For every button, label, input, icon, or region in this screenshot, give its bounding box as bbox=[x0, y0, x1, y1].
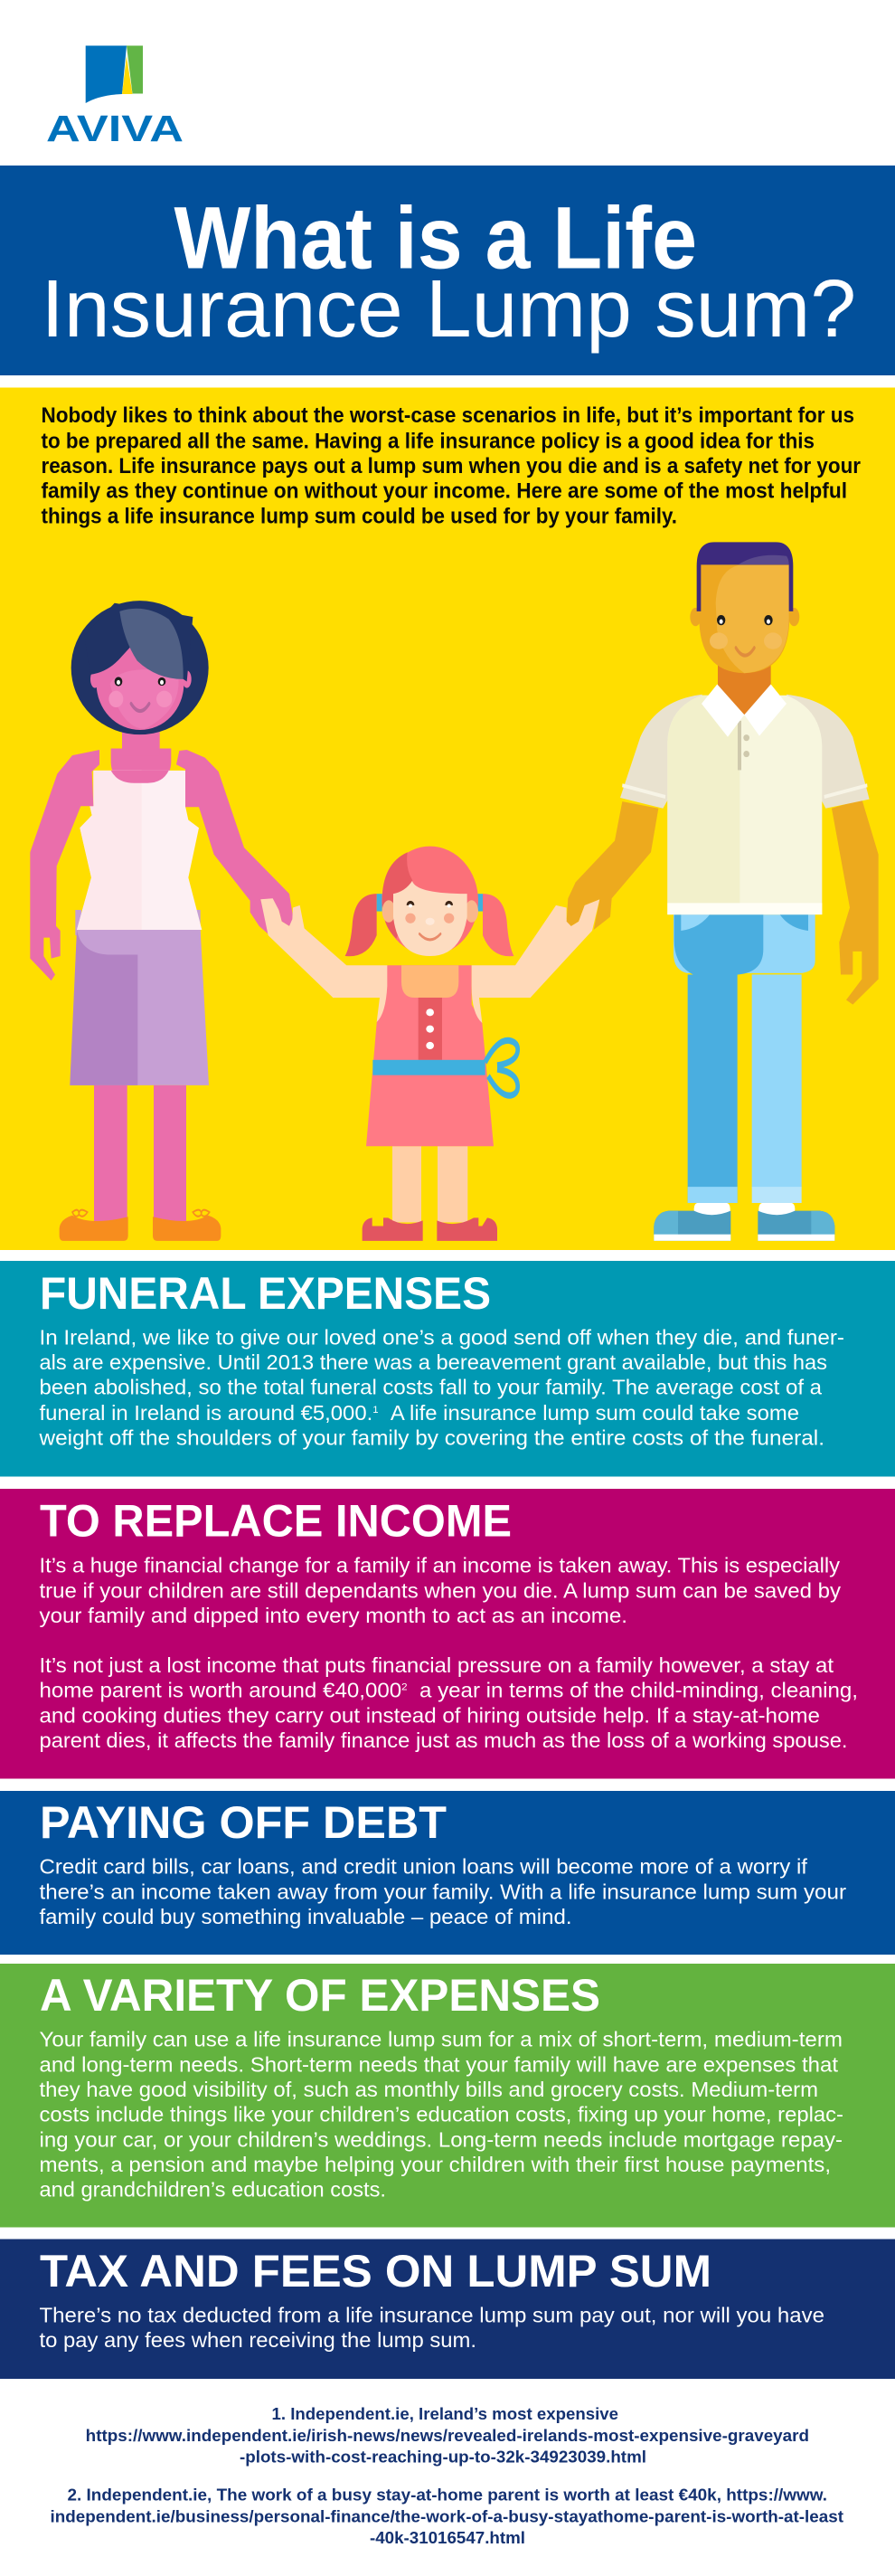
intro text: things a life insurance lump sum could be used for by your family. bbox=[42, 505, 677, 528]
heading: TAX AND FEES ON LUMP SUM bbox=[40, 2246, 711, 2297]
title line 1: What is a Life bbox=[174, 188, 697, 288]
body text: als are expensive. Until 2013 there was a bereavement grant available, but this has bbox=[40, 1350, 827, 1374]
panel: tax and fees on lump sum bbox=[0, 2240, 895, 2379]
title banner bbox=[0, 166, 895, 375]
body text: funeral in Ireland is around €5,000. bbox=[40, 1401, 361, 1425]
logo: Aviva bbox=[46, 45, 184, 149]
heading: TO REPLACE INCOME bbox=[40, 1496, 512, 1547]
body text: and cooking duties they carry out instead of hiring outside help. If a stay-at-home bbox=[40, 1704, 820, 1728]
footnotes: sources: https://www.independent.ie/irish-news/news/revealed-irelands-most-expensive-graveyard bbox=[86, 2426, 809, 2445]
body text: home parent is worth around €40,000 bbox=[40, 1679, 385, 1702]
figure: father bbox=[567, 542, 879, 1241]
body text: and long-term needs. Short-term needs that your family will have are expenses that bbox=[40, 2053, 839, 2077]
panel: to replace income bbox=[0, 1489, 895, 1778]
body text: and grandchildren’s education costs. bbox=[40, 2178, 386, 2202]
panel: funeral expenses bbox=[0, 1261, 895, 1476]
panel: intro and family illustration bbox=[0, 387, 895, 1250]
body text bbox=[40, 1854, 846, 1928]
body text: a year in terms of the child-minding, cleaning, bbox=[408, 1679, 858, 1702]
figure: daughter bbox=[260, 847, 599, 1241]
body text: Your family can use a life insurance lump sum for a mix of short-term, medium-term bbox=[40, 2028, 843, 2051]
body text: they have good visibility of, such as monthly bills and grocery costs. Medium-term bbox=[40, 2078, 818, 2101]
heading: PAYING OFF DEBT bbox=[40, 1797, 447, 1848]
body text: In Ireland, we like to give our loved one’s a good send off when they die, and funer- bbox=[40, 1326, 844, 1350]
body text: It’s not just a lost income that puts financial pressure on a family however, a stay at bbox=[40, 1653, 834, 1677]
heading: FUNERAL EXPENSES bbox=[40, 1268, 491, 1319]
body text: there’s an income taken away from your family. With a life insurance lump sum your bbox=[40, 1880, 846, 1903]
body text: costs include things like your children’s education costs, fixing up your home, replac- bbox=[40, 2102, 843, 2126]
intro text: Nobody likes to think about the worst-case scenarios in life, but it’s important for us bbox=[42, 403, 854, 428]
body text: It’s a huge financial change for a family if an income is taken away. This is especially bbox=[40, 1554, 841, 1577]
intro text: reason. Life insurance pays out a lump sum when you die and is a safety net for your bbox=[42, 454, 861, 478]
footnotes: sources: 1. Independent.ie, Ireland’s most expensive bbox=[271, 2404, 618, 2423]
body text: 1 bbox=[372, 1405, 379, 1416]
panel: paying off debt bbox=[0, 1791, 895, 1955]
body text: been abolished, so the total funeral costs fall to your family. The average cost of a bbox=[40, 1375, 822, 1398]
footnotes: sources: -plots-with-cost-reaching-up-to-32k-34923039.html bbox=[240, 2448, 646, 2466]
body text bbox=[40, 1554, 858, 1752]
body text: parent dies, it affects the family finance just as much as the loss of a working spouse. bbox=[40, 1728, 848, 1752]
intro text bbox=[42, 403, 861, 528]
title line 2: Insurance Lump sum? bbox=[42, 264, 856, 355]
body text: A life insurance lump sum could take some bbox=[379, 1401, 799, 1425]
body text: to pay any fees when receiving the lump sum. bbox=[40, 2328, 476, 2352]
footnotes: sources: -40k-31016547.html bbox=[370, 2528, 525, 2547]
body text: ments, a pension and maybe helping your children with their first house payments, bbox=[40, 2153, 831, 2176]
footnotes: sources bbox=[51, 2404, 843, 2547]
body text: ing your car, or your children’s weddings. Long-term needs include mortgage repay- bbox=[40, 2127, 843, 2151]
intro text: family as they continue on without your income. Here are some of the most helpful bbox=[42, 479, 847, 503]
body text: your family and dipped into every month to act as an income. bbox=[40, 1604, 627, 1627]
body text bbox=[38, 1326, 844, 1449]
body text: 2 bbox=[401, 1682, 408, 1693]
intro text: to be prepared all the same. Having a life insurance policy is a good idea for this bbox=[42, 429, 815, 454]
logo: Aviva: AVIVA bbox=[46, 108, 184, 149]
figure: mother bbox=[30, 601, 294, 1241]
footnotes: sources: independent.ie/business/personal-finance/the-work-of-a-busy-stayathome-parent-is-worth-at-least bbox=[51, 2507, 843, 2525]
body text: Credit card bills, car loans, and credit union loans will become more of a worry if bbox=[40, 1854, 808, 1878]
body text: family could buy something invaluable – peace of mind. bbox=[40, 1905, 571, 1928]
body text: There’s no tax deducted from a life insurance lump sum pay out, nor will you have bbox=[40, 2303, 824, 2326]
body text: weight off the shoulders of your family by covering the entire costs of the funeral. bbox=[38, 1425, 824, 1449]
heading: A VARIETY OF EXPENSES bbox=[40, 1970, 600, 2021]
panel: a variety of expenses bbox=[0, 1964, 895, 2227]
footnotes: sources: 2. Independent.ie, The work of a busy stay-at-home parent is worth at least €40k, https://www. bbox=[67, 2486, 827, 2504]
illustration: family holding hands bbox=[30, 542, 879, 1241]
body text bbox=[40, 2303, 824, 2352]
body text bbox=[40, 2028, 843, 2202]
body text: true if your children are still dependants when you die. A lump sum can be saved by bbox=[40, 1579, 842, 1603]
